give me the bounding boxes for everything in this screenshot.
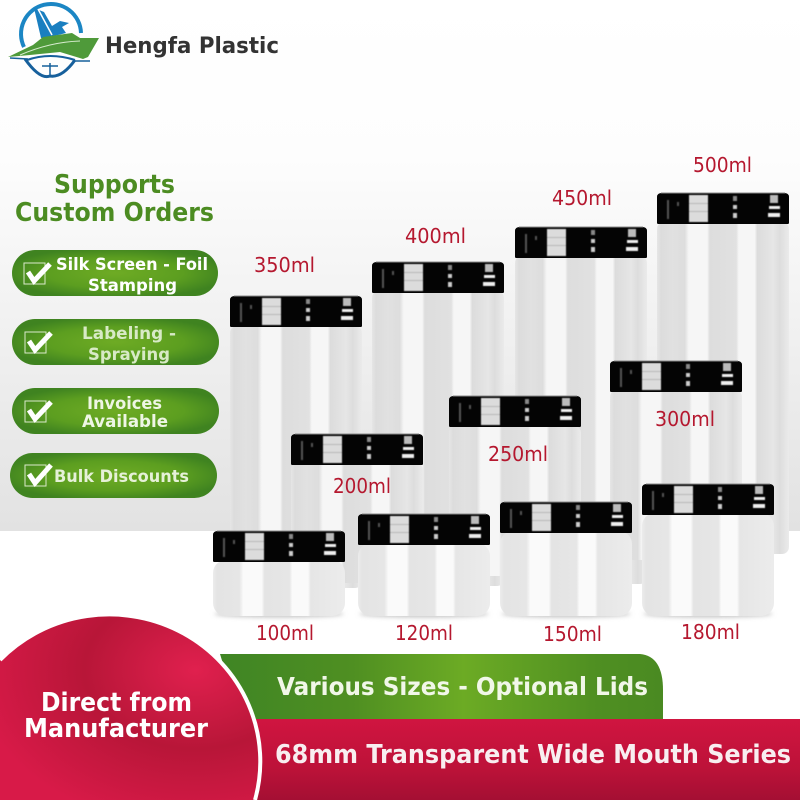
button: silk screen - foil stamping	[12, 250, 218, 296]
jar: 250ml	[449, 396, 581, 576]
volume labels: 350ml	[254, 253, 315, 277]
heading: supports custom orders	[15, 170, 214, 228]
button: labeling - spraying	[12, 319, 219, 365]
heading: supports custom orders: Custom Orders	[15, 198, 214, 228]
volume labels: 200ml	[333, 474, 391, 498]
button: invoices available: Available	[82, 412, 168, 432]
volume labels: 250ml	[488, 442, 548, 466]
button: labeling - spraying: Spraying	[88, 345, 170, 365]
volume labels: 300ml	[655, 407, 715, 431]
jar: 120ml	[358, 514, 490, 618]
button: bulk discounts	[10, 453, 217, 498]
volume labels: 150ml	[543, 622, 602, 646]
badge: direct from manufacturer	[0, 614, 260, 800]
jar: 150ml	[500, 502, 632, 618]
jar: 100ml	[213, 530, 345, 618]
banner: various sizes: Various Sizes - Optional Lids	[277, 672, 648, 701]
volume labels: 500ml	[693, 153, 752, 177]
volume labels: 400ml	[405, 224, 466, 248]
volume labels: 120ml	[395, 621, 453, 645]
badge: direct from manufacturer: Manufacturer	[24, 714, 208, 744]
jar: 450ml	[515, 226, 647, 584]
heading: supports custom orders: Supports	[54, 170, 175, 200]
jar: 180ml	[642, 484, 774, 618]
volume labels: 450ml	[552, 186, 612, 210]
volume labels: 180ml	[681, 620, 740, 644]
jar: 400ml	[372, 262, 504, 586]
button: invoices available	[12, 388, 219, 434]
icon: company logo	[8, 4, 99, 77]
jar: 500ml	[657, 192, 789, 554]
volume labels	[254, 153, 752, 646]
badge: direct from manufacturer: Direct from	[41, 688, 192, 718]
jar: 300ml	[610, 360, 742, 560]
jar: 200ml	[291, 434, 423, 583]
button: invoices available: Invoices	[87, 394, 162, 414]
background gradient	[0, 0, 800, 531]
button: labeling - spraying: Labeling -	[82, 324, 176, 344]
banner: series name	[240, 719, 800, 800]
jar: 350ml	[230, 296, 362, 588]
button: bulk discounts: Bulk Discounts	[54, 467, 189, 487]
banner: various sizes	[220, 654, 663, 719]
button: silk screen - foil stamping: Stamping	[88, 276, 177, 296]
volume labels: 100ml	[256, 621, 314, 645]
company name: Hengfa Plastic	[105, 34, 279, 59]
button: silk screen - foil stamping: Silk Screen - Foil	[56, 255, 208, 275]
